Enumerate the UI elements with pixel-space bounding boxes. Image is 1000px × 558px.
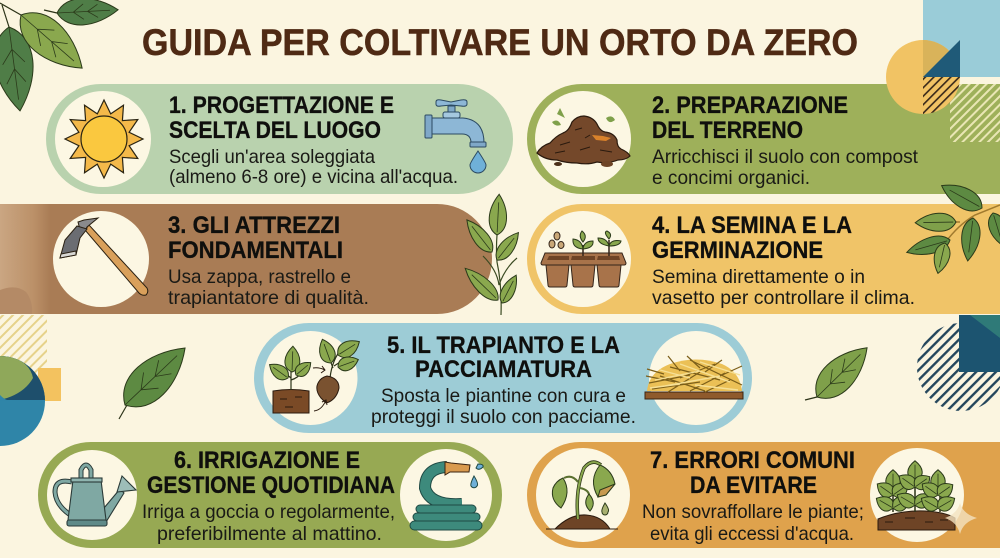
plant: centre sprig [460, 194, 524, 315]
panel: step 2 [527, 84, 1000, 194]
heading line: step 4: GERMINAZIONE [652, 237, 823, 264]
heading line: step 3: FONDAMENTALI [168, 237, 343, 264]
icon: sparkle watermark [945, 503, 977, 534]
heading: step 1: 1. PROGETTAZIONE E [169, 92, 394, 119]
leaf: middle right [805, 337, 878, 408]
heading line: step 7: DA EVITARE [690, 472, 817, 499]
icon: wilted plant [546, 462, 618, 529]
text: step 3: Usa zappa, rastrello e [168, 266, 351, 288]
branch: right leaves [905, 177, 1000, 275]
icon: garden hose [410, 462, 483, 530]
icon: soil mound [537, 108, 630, 167]
icon: straw mulch [645, 356, 743, 399]
text: step 5: Sposta le piantine con cura e [381, 385, 626, 407]
decoration: left stripes and circle [0, 315, 61, 446]
panel: step 5 [254, 323, 752, 433]
heading: step 6: 6. IRRIGAZIONE E [174, 447, 360, 474]
icon: watering can [55, 465, 136, 526]
text line: step 5: proteggi il suolo con pacciame. [371, 406, 636, 428]
heading: step 5: 5. IL TRAPIANTO E LA [387, 332, 620, 359]
icon: transplanted seedlings [266, 335, 363, 413]
text: step 2: Arricchisci il suolo con compost [652, 146, 919, 168]
text line: step 6: preferibilmente al mattino. [157, 523, 382, 545]
heading line: step 6: GESTIONE QUOTIDIANA [147, 472, 395, 499]
heading line: step 2: DEL TERRENO [652, 117, 803, 144]
icon: healthy plants [873, 461, 958, 530]
leaf: middle left [112, 334, 198, 419]
heading: step 2: 2. PREPARAZIONE [652, 92, 848, 119]
icon: faucet [425, 100, 486, 173]
panel: step 6 [38, 442, 502, 548]
text: step 4: Semina direttamente o in [652, 266, 865, 288]
heading line: step 1: SCELTA DEL LUOGO [169, 117, 381, 144]
text line: step 4: vasetto per controllare il clima. [652, 287, 915, 309]
panel: step 1 [46, 84, 513, 194]
decoration: top right shapes [886, 0, 1000, 114]
heading: step 4: 4. LA SEMINA E LA [652, 212, 852, 239]
title: GUIDA PER COLTIVARE UN ORTO DA ZERO [142, 22, 858, 63]
icon: hoe [60, 218, 148, 295]
heading: step 3: 3. GLI ATTREZZI [168, 212, 340, 239]
panel: step 4 [527, 204, 1000, 314]
decoration: right stripes and navy block [917, 315, 1000, 411]
text: step 7: Non sovraffollare le piante; [642, 501, 864, 523]
heading line: step 5: PACCIAMATURA [415, 356, 592, 383]
text line: step 3: trapiantatore di qualità. [168, 287, 369, 309]
heading: step 7: 7. ERRORI COMUNI [650, 447, 855, 474]
leaves: top left [0, 0, 119, 113]
text line: step 7: evita gli eccessi d'acqua. [650, 523, 854, 545]
panel: step 3 [0, 204, 492, 314]
text: step 6: Irriga a goccia o regolarmente, [142, 501, 395, 523]
icon: seedling tray [541, 231, 626, 287]
text line: step 1: (almeno 6-8 ore) e vicina all'acqua. [169, 166, 458, 188]
icon: sun [65, 100, 143, 178]
text: step 1: Scegli un'area soleggiata [169, 146, 375, 168]
panel: step 7 [527, 442, 1000, 548]
stripes: top right [950, 84, 1000, 142]
text line: step 2: e concimi organici. [652, 167, 810, 189]
